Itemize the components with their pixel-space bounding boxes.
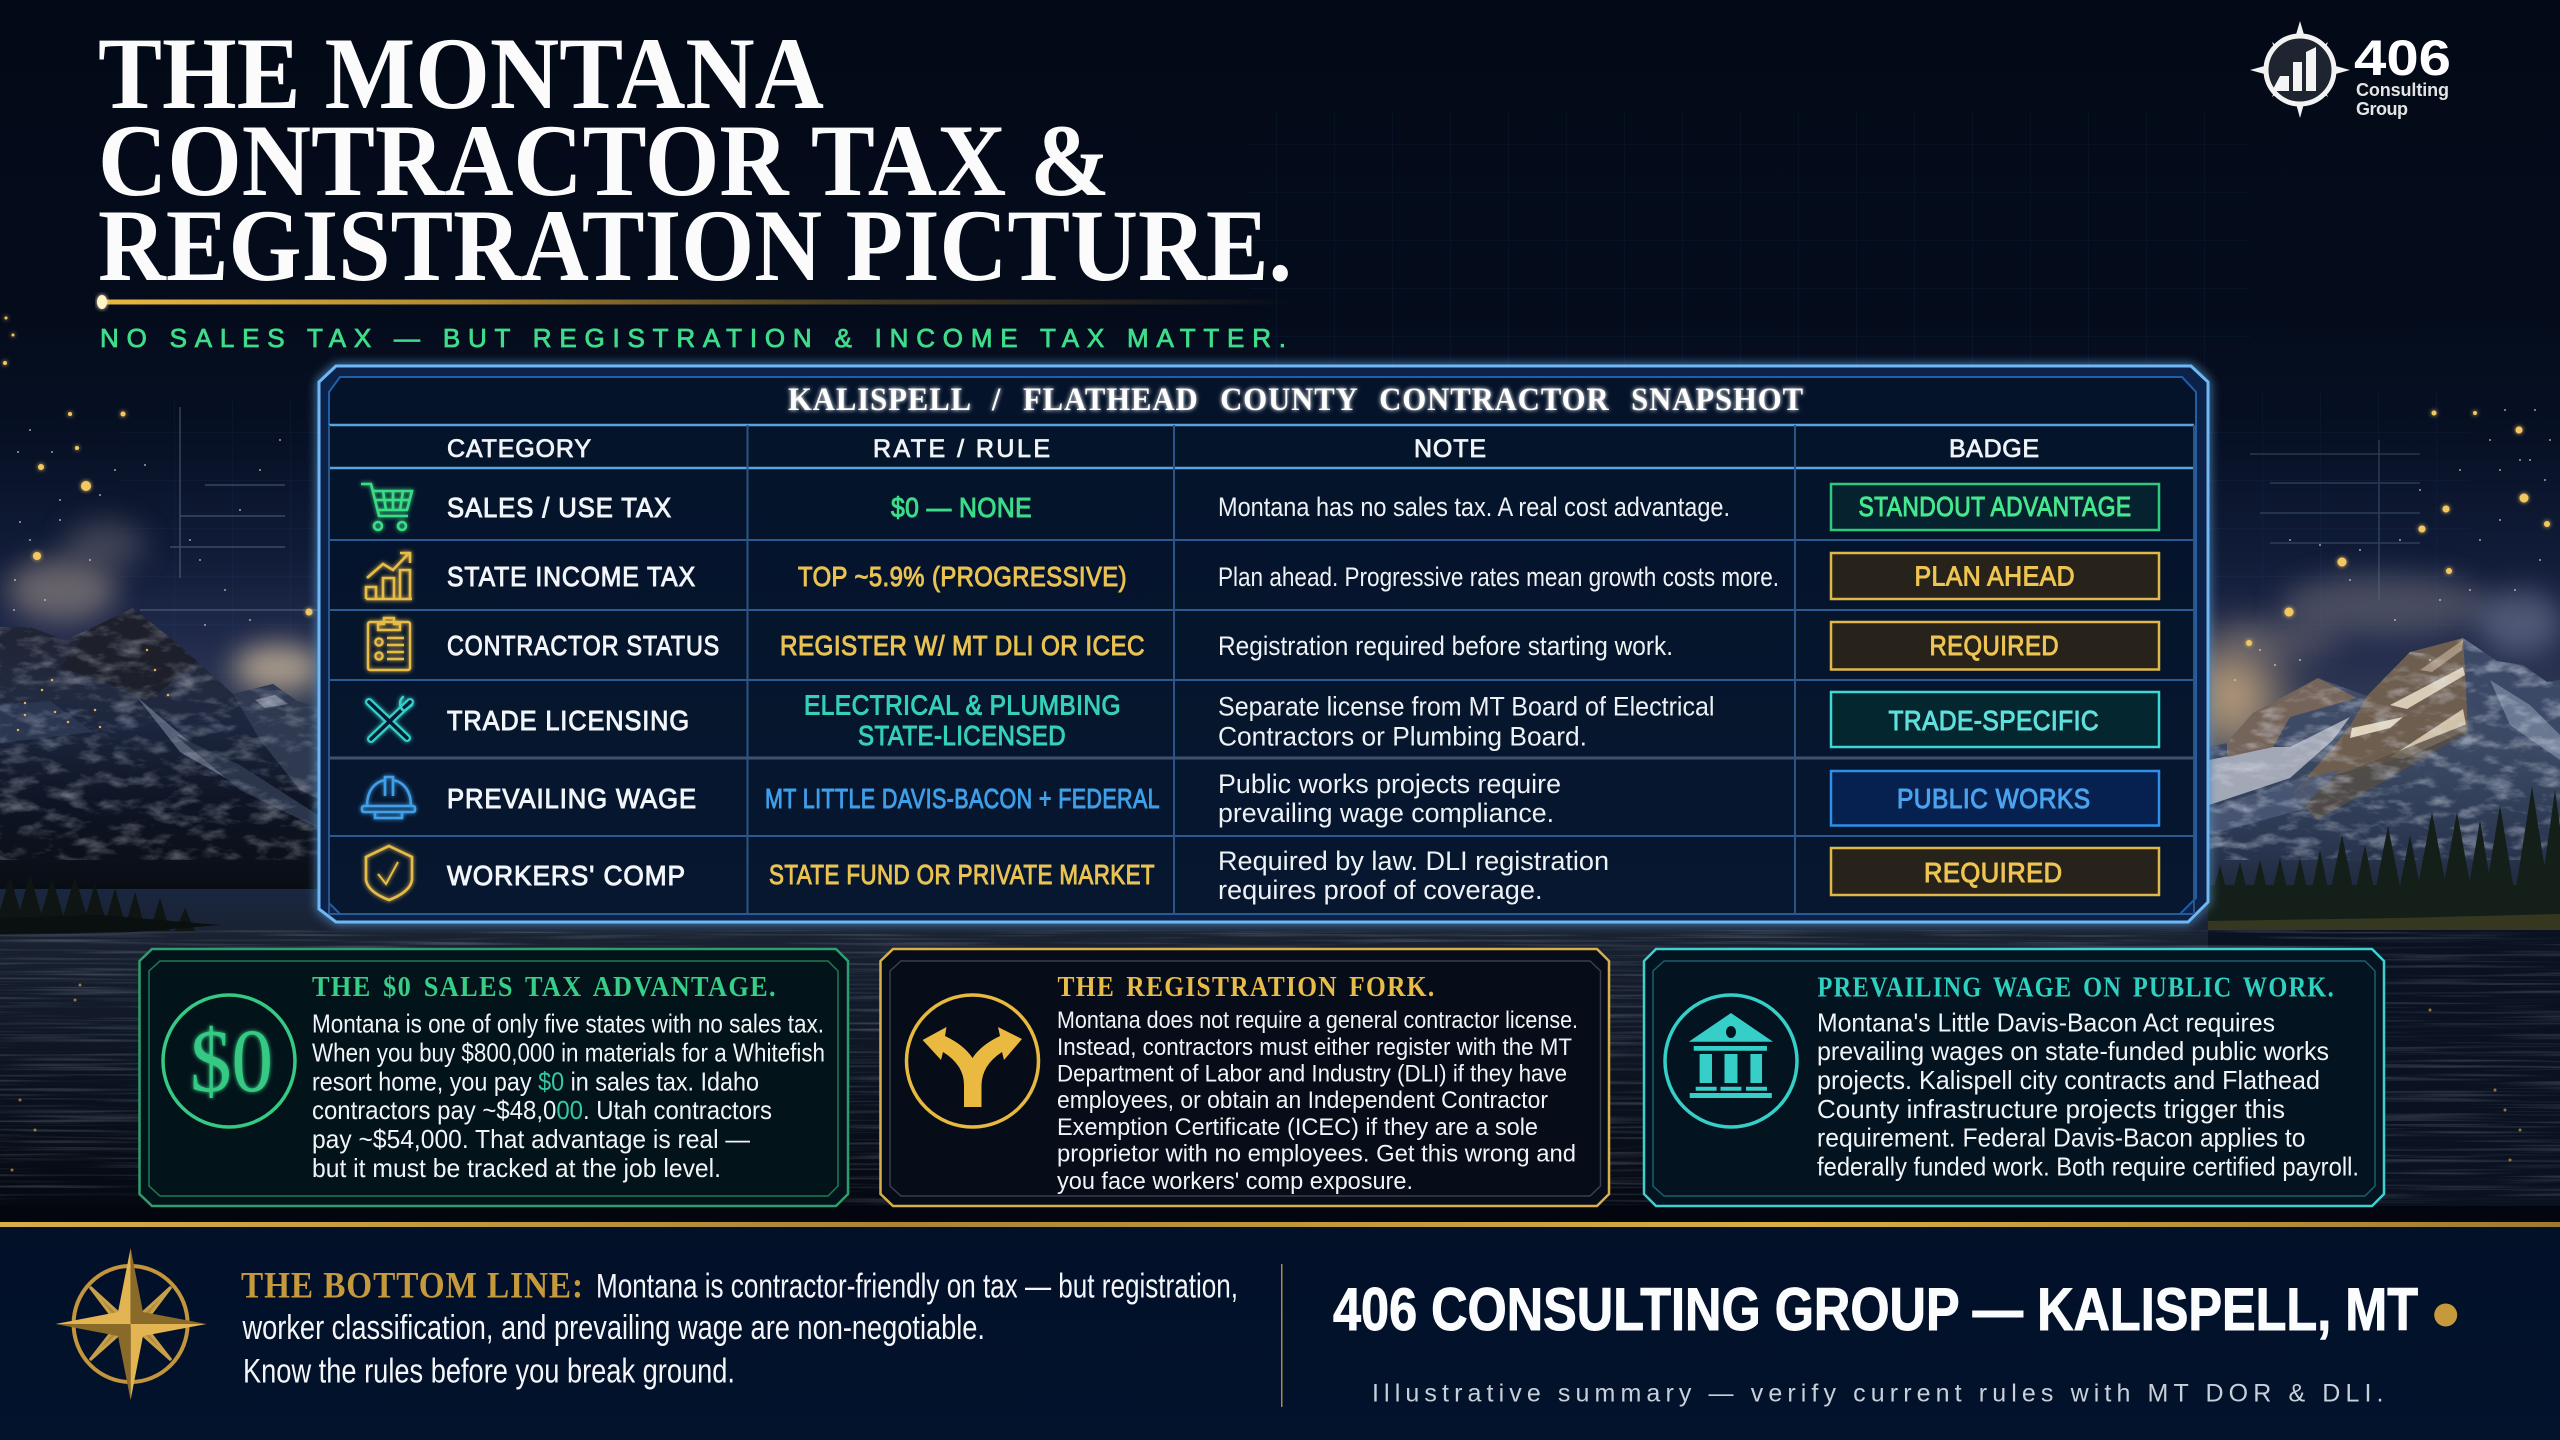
small star dust: [14, 410, 2550, 680]
badge: public works: PUBLIC WORKS: [1897, 783, 2090, 814]
icon: forked arrow circle: [906, 995, 1038, 1127]
card body text: federally funded work. Both require certified payroll.: [1817, 1152, 2359, 1182]
row: contractor status: REGISTER W/ MT DLI OR ICEC: [780, 630, 1145, 661]
panel: the $0 sales tax advantage: [140, 949, 848, 1206]
card body text: Department of Labor and Industry (DLI) if they have: [1057, 1061, 1567, 1088]
panel: prevailing wage on public work: PREVAILING WAGE ON PUBLIC WORK.: [1818, 972, 2335, 1004]
badge: plan ahead: PLAN AHEAD: [1914, 560, 2075, 592]
lake: [0, 889, 2208, 1222]
faint blueprint grid: [120, 110, 2470, 690]
badge: required: [1831, 622, 2159, 670]
card body text: pay ~$54,000. That advantage is real —: [312, 1124, 750, 1154]
table header row: RATE / RULE: [873, 435, 1050, 463]
badge: public works: [1831, 771, 2159, 826]
card body text: requirement. Federal Davis-Bacon applies to: [1817, 1123, 2306, 1153]
card body text: resort home, you pay $0 in sales tax. Idaho: [312, 1067, 759, 1097]
dark strip above footer: [0, 1206, 2560, 1222]
card body text: employees, or obtain an Independent Contractor: [1057, 1087, 1548, 1114]
row: state income tax: TOP ~5.9% (PROGRESSIVE): [798, 561, 1127, 592]
row: trade licensing: TRADE LICENSING: [447, 705, 690, 736]
footer band: [0, 1222, 2560, 1440]
gold stars: [3, 316, 2550, 646]
row: contractor status: [368, 618, 2159, 670]
clouds and horizon glow: [7, 521, 2560, 747]
title: [98, 17, 1292, 303]
icon: government building circle: [1665, 995, 1797, 1127]
row: prevailing wage: PREVAILING WAGE: [447, 783, 697, 814]
card body text: Instead, contractors must either register with the MT: [1057, 1034, 1572, 1061]
left forest: [0, 874, 220, 935]
card body text: you face workers' comp exposure.: [1057, 1168, 1413, 1195]
table header row: CATEGORY: [447, 435, 591, 463]
bottom line statement: [241, 1266, 1238, 1391]
card body text: prevailing wages on state-funded public works: [1817, 1036, 2329, 1066]
row: trade licensing: Separate license from MT Board of Electrical: [1218, 692, 1714, 722]
row: prevailing wage: prevailing wage compliance.: [1218, 798, 1554, 828]
badge: standout advantage: STANDOUT ADVANTAGE: [1858, 491, 2132, 522]
right forest: [2204, 786, 2560, 927]
shoreline gold reflections: [12, 985, 2520, 1170]
logo: 406 Consulting Group: Consulting: [2356, 80, 2449, 100]
row: contractor status: Registration required before starting work.: [1218, 631, 1673, 661]
row: workers' comp: Required by law. DLI registration: [1218, 846, 1609, 876]
card body text: Montana's Little Davis-Bacon Act requires: [1817, 1008, 2275, 1038]
badge: standout advantage: [1831, 484, 2159, 530]
card body text: Montana is one of only five states with no sales tax.: [312, 1009, 824, 1039]
row: prevailing wage: [362, 769, 2159, 828]
row: sales and use tax: SALES / USE TAX: [447, 492, 672, 523]
icon: crossed tools: [369, 697, 412, 739]
row: prevailing wage: Public works projects require: [1218, 769, 1561, 799]
gold underline with spark: [97, 295, 1292, 309]
row: state income tax: [366, 553, 2159, 599]
panel: the $0 sales tax advantage: THE $0 SALES TAX ADVANTAGE.: [312, 971, 777, 1003]
card body text: contractors pay ~$48,000. Utah contractors: [312, 1095, 772, 1125]
badge: required: [1831, 848, 2159, 895]
forest shoreline: [2208, 885, 2560, 930]
panel: the registration fork: THE REGISTRATION FORK.: [1058, 971, 1436, 1003]
left mountains: [0, 608, 320, 889]
left gold lights on mountain: [18, 650, 168, 730]
row: sales and use tax: Montana has no sales tax. A real cost advantage.: [1218, 492, 1730, 522]
icon: clipboard checklist: [368, 618, 410, 670]
row: workers' comp: requires proof of coverage.: [1218, 875, 1542, 905]
badge: required: REQUIRED: [1930, 630, 2059, 661]
logo compass mark: [2250, 21, 2350, 118]
card body text: but it must be tracked at the job level.: [312, 1153, 721, 1183]
row: trade licensing: STATE-LICENSED: [858, 720, 1066, 751]
table header row: BADGE: [1949, 435, 2039, 463]
row: workers' comp: [366, 846, 2159, 905]
row: trade licensing: [369, 690, 2159, 752]
right mountains: [2209, 638, 2560, 900]
icon: hard hat: [362, 777, 415, 818]
bottom line statement: worker classification, and prevailing wage are non-negotiable.: [242, 1309, 985, 1347]
disclaimer: Illustrative summary — verify current rules with MT DOR & DLI.: [1372, 1380, 2384, 1408]
card body text: [312, 1009, 825, 1183]
badge: plan ahead: [1831, 553, 2159, 599]
panel: prevailing wage on public work: [1644, 949, 2384, 1206]
table grid lines: [329, 425, 2194, 468]
icon: $0 circle: $0: [190, 1012, 273, 1111]
logo: 406 Consulting Group: [2250, 21, 2451, 119]
bottom line statement: Montana is contractor-friendly on tax — but registration,: [596, 1268, 1238, 1306]
table title: KALISPELL / FLATHEAD COUNTY CONTRACTOR SNAPSHOT: [788, 382, 1804, 418]
card body text: Montana does not require a general contractor license.: [1057, 1007, 1578, 1034]
badge: trade-specific: TRADE-SPECIFIC: [1888, 705, 2099, 736]
card body text: [1057, 1007, 1578, 1195]
card body text: County infrastructure projects trigger this: [1817, 1094, 2285, 1124]
icon: gold compass rose: [56, 1248, 206, 1400]
card body text: Exemption Certificate (ICEC) if they are a sole: [1057, 1114, 1538, 1141]
row: sales and use tax: $0 — NONE: [891, 492, 1032, 523]
title: CONTRACTOR TAX &: [98, 104, 1110, 218]
panel: contractor snapshot table: [319, 366, 2208, 922]
icon: shopping cart: [361, 484, 412, 530]
row: state income tax: Plan ahead. Progressive rates mean growth costs more.: [1218, 562, 1779, 592]
panel: the registration fork: [880, 949, 1609, 1206]
title: REGISTRATION PICTURE.: [98, 189, 1292, 303]
bottom line statement: THE BOTTOM LINE:: [241, 1266, 584, 1307]
badge: trade-specific: [1831, 692, 2159, 747]
card frame: [140, 949, 848, 1206]
row: trade licensing: Contractors or Plumbing Board.: [1218, 722, 1587, 752]
row: trade licensing: ELECTRICAL & PLUMBING: [804, 690, 1121, 720]
table header row: NOTE: [1414, 435, 1486, 463]
bottom line statement: Know the rules before you break ground.: [243, 1353, 735, 1391]
row: sales and use tax: [361, 484, 2159, 530]
badge: required: REQUIRED: [1924, 857, 2062, 888]
icon: shield check: [366, 846, 412, 900]
logo: 406 Consulting Group: 406: [2354, 30, 2451, 86]
row: workers' comp: WORKERS' COMP: [447, 860, 686, 891]
row: contractor status: CONTRACTOR STATUS: [447, 630, 720, 661]
row: state income tax: STATE INCOME TAX: [447, 561, 696, 592]
card frame: [880, 949, 1609, 1206]
subtitle: NO SALES TAX — BUT REGISTRATION & INCOME TAX MATTER.: [100, 323, 1286, 353]
row: workers' comp: STATE FUND OR PRIVATE MARKET: [769, 859, 1155, 890]
card frame: [1644, 949, 2384, 1206]
card body text: proprietor with no employees. Get this wrong and: [1057, 1141, 1576, 1168]
water ripple texture: [0, 930, 2560, 1205]
card body text: [1817, 1008, 2359, 1182]
card body text: projects. Kalispell city contracts and Flathead: [1817, 1065, 2320, 1095]
logo: 406 Consulting Group: Group: [2356, 99, 2408, 119]
title: THE MONTANA: [98, 17, 824, 131]
icon: growth chart: [366, 553, 412, 599]
panel frame: [319, 366, 2208, 922]
card body text: When you buy $800,000 in materials for a Whitefish: [312, 1038, 825, 1068]
row: prevailing wage: MT LITTLE DAVIS-BACON + FEDERAL: [765, 783, 1160, 814]
icon: $0 circle: [163, 995, 295, 1127]
table header row: [447, 435, 2039, 463]
